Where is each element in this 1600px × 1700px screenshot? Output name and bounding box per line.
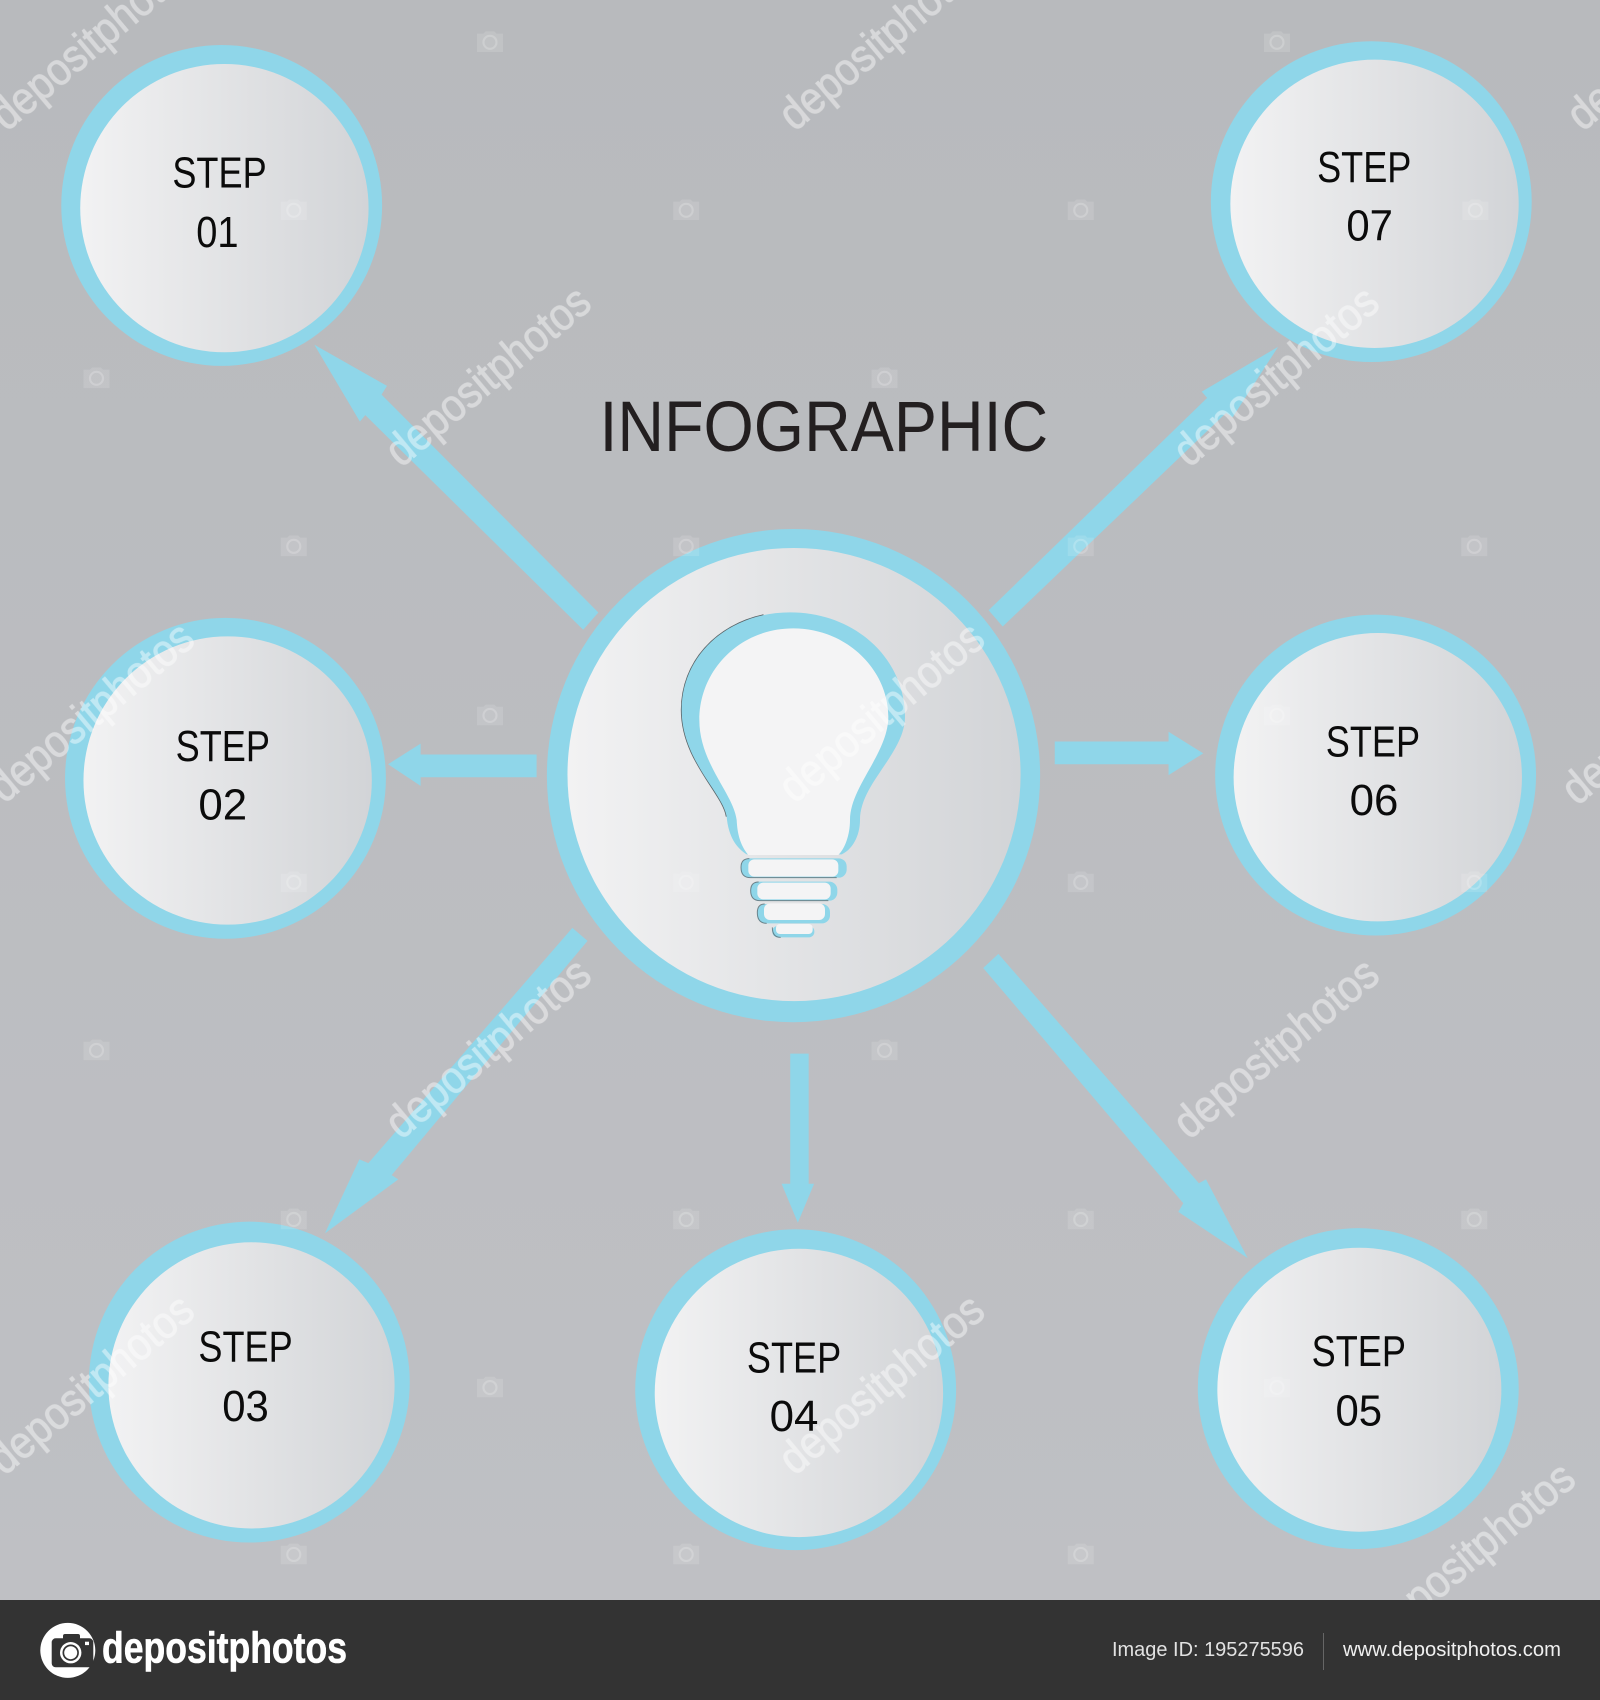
- panel: step 05: [1198, 1228, 1519, 1549]
- watermark text: depositphotos: [768, 611, 994, 812]
- number: 04: [770, 1393, 818, 1441]
- label: STEP: [176, 723, 270, 771]
- disc: [1217, 1248, 1501, 1532]
- bulb shadow edge: [682, 612, 790, 817]
- watermark text: depositphotos: [375, 947, 600, 1148]
- ring: [1198, 1228, 1519, 1549]
- panel: step 06: [1215, 615, 1536, 936]
- label: STEP: [198, 1324, 293, 1372]
- image id: Image ID: 195275596: [1112, 1639, 1304, 1661]
- ring: [635, 1229, 956, 1550]
- ring: [89, 1222, 410, 1543]
- title: INFOGRAPHIC: [599, 387, 1048, 467]
- website: www.depositphotos.com: [1342, 1639, 1561, 1661]
- arrow to step 04: [782, 1054, 814, 1223]
- watermark text: depositphotos: [1163, 275, 1388, 476]
- screw thread 4: [772, 924, 814, 937]
- panel: step 01: [61, 45, 382, 366]
- disc: [80, 64, 369, 352]
- arrow to step 02: [388, 744, 537, 786]
- bulb glass: [699, 628, 888, 855]
- bulb outline: [682, 612, 905, 854]
- hub disc: [567, 548, 1021, 1001]
- arrow to step 06: [1055, 732, 1203, 775]
- icon: depositphotos logo: [40, 1623, 95, 1678]
- label: STEP: [1326, 719, 1420, 767]
- number: 02: [198, 782, 247, 830]
- screw thread 3: [757, 903, 830, 923]
- logo wordmark: depositphotos: [102, 1624, 347, 1672]
- panel: central hub: [547, 529, 1040, 1022]
- disc: [108, 1242, 395, 1528]
- hub ring: [547, 529, 1040, 1022]
- ring: [1215, 615, 1536, 936]
- ring: [1211, 41, 1532, 362]
- footer background: [0, 1600, 1600, 1700]
- disc: [83, 636, 372, 925]
- divider: [1323, 1633, 1324, 1670]
- watermark text: depositphotos: [375, 275, 600, 476]
- panel: step 07: [1211, 41, 1532, 362]
- arrow to step 03: [325, 928, 588, 1233]
- label: STEP: [1317, 144, 1411, 192]
- arrow to step 05: [983, 954, 1248, 1258]
- screw thread 2: [751, 882, 837, 901]
- ring: [61, 45, 382, 366]
- footer bar: [0, 1600, 1600, 1700]
- watermark text: depositphotos: [768, 1283, 994, 1484]
- screw thread 1: [741, 858, 847, 878]
- label: STEP: [1312, 1328, 1406, 1376]
- disc: [655, 1249, 943, 1537]
- number: 07: [1346, 203, 1393, 251]
- panel: step 03: [89, 1222, 410, 1543]
- disc: [1230, 60, 1519, 348]
- number: 06: [1350, 777, 1398, 825]
- panel: step 02: [65, 618, 386, 939]
- watermark text: depositphotos: [1163, 947, 1388, 1148]
- ring: [65, 618, 386, 939]
- watermark icons: [83, 31, 1488, 1564]
- number: 05: [1336, 1387, 1382, 1435]
- icon: light bulb: [682, 612, 905, 937]
- arrow to step 07: [989, 347, 1278, 627]
- number: 03: [222, 1383, 269, 1431]
- label: STEP: [172, 150, 267, 198]
- disc: [1234, 633, 1522, 921]
- label: STEP: [747, 1334, 841, 1382]
- arrow to step 01: [314, 345, 598, 630]
- number: 01: [196, 209, 238, 257]
- panel: step 04: [635, 1229, 956, 1550]
